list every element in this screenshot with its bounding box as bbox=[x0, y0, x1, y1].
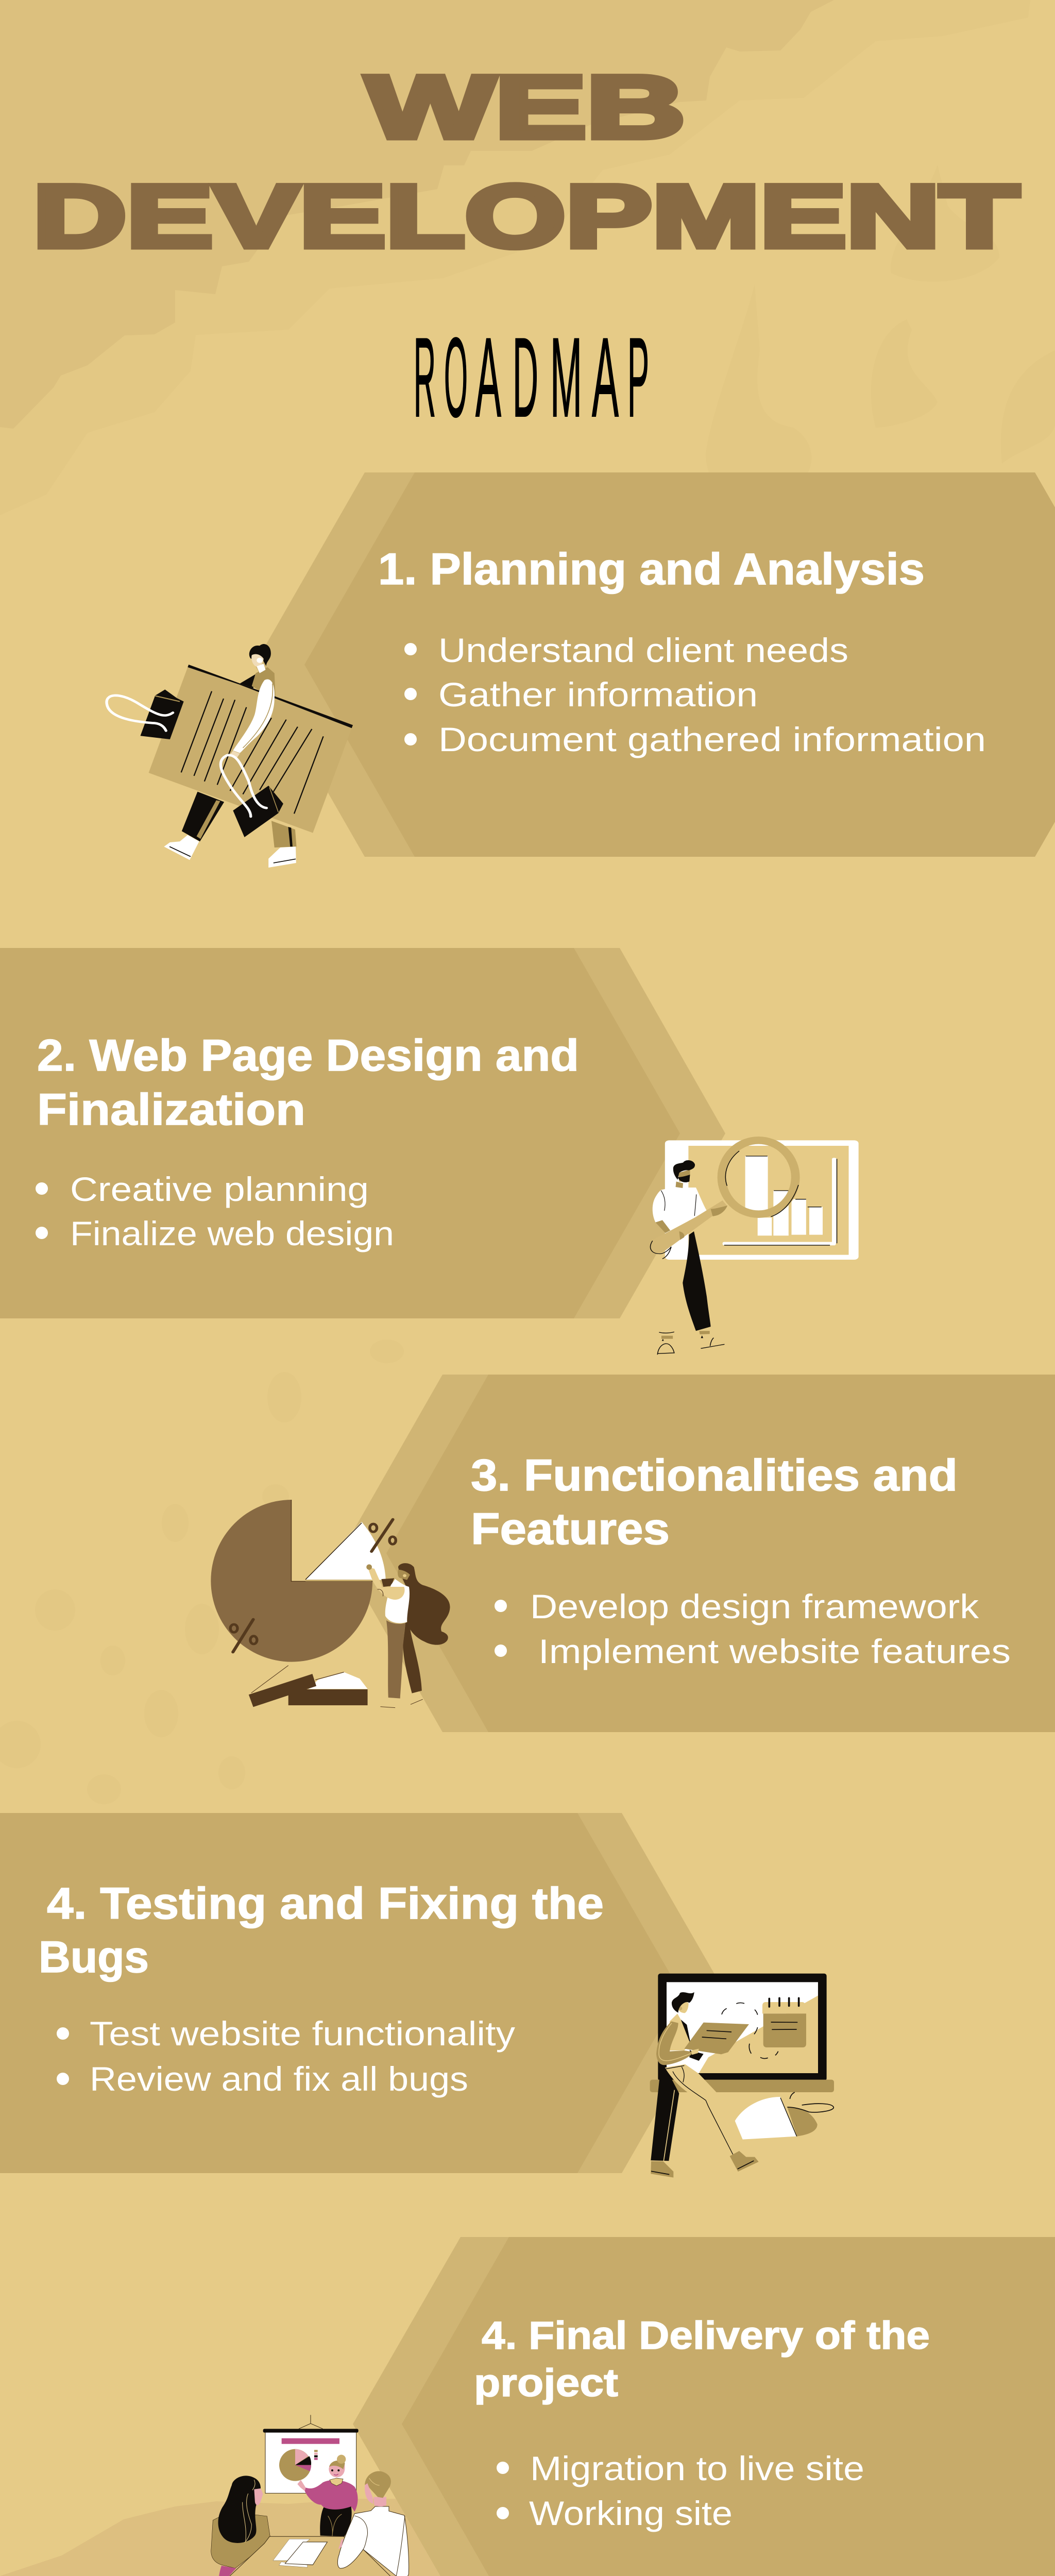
panel 4 outer band bbox=[0, 1813, 725, 2173]
panel 1 bullet list: Document gathered information bbox=[438, 720, 986, 758]
subtitle: roadmap: A bbox=[592, 315, 619, 440]
panel 5: final delivery of the project bbox=[353, 2237, 1055, 2576]
panel 2 outer band bbox=[0, 948, 725, 1318]
text: P bbox=[627, 315, 649, 440]
panel 1 inner band bbox=[304, 472, 1055, 857]
panel 4 inner band bbox=[0, 1813, 681, 2173]
panel 1 bullet list bbox=[404, 631, 986, 758]
panel 5 heading: project bbox=[474, 2361, 618, 2405]
panel 2 inner band bbox=[0, 948, 680, 1318]
panel 5 bullet list: Migration to live site bbox=[530, 2449, 864, 2487]
illustration: team meeting with presentation screen bbox=[211, 2415, 409, 2576]
panel 2: web page design and finalization bbox=[0, 948, 725, 1318]
subtitle: roadmap: M bbox=[550, 315, 582, 440]
panel 4: testing and fixing the bugs bbox=[0, 1813, 725, 2173]
panel 4 bullet list bbox=[57, 2014, 515, 2098]
panel 3 heading bbox=[471, 1451, 958, 1554]
panel 1 outer band bbox=[254, 472, 1055, 857]
panel 3 heading: Features bbox=[471, 1504, 670, 1554]
panel 1 heading: 1. Planning and Analysis bbox=[378, 545, 925, 594]
subtitle: roadmap: R bbox=[414, 315, 436, 440]
title: web development bbox=[33, 58, 1019, 266]
panel 2 heading: 2. Web Page Design and bbox=[37, 1031, 579, 1080]
subtitle: roadmap: O bbox=[444, 315, 468, 440]
panel 4 bullet list: Test website functionality bbox=[90, 2014, 515, 2053]
panel 1 bullet list: Gather information bbox=[438, 675, 758, 714]
panel 3 bullet list: Implement website features bbox=[538, 1632, 1011, 1670]
panel 4 heading: 4. Testing and Fixing the bbox=[47, 1879, 604, 1928]
subtitle: roadmap bbox=[414, 315, 649, 440]
panel 4 heading bbox=[39, 1879, 604, 1982]
panel 3 inner band bbox=[386, 1375, 1055, 1732]
illustration: man with magnifying glass and bar chart bbox=[651, 1140, 859, 1354]
panel 5 inner band bbox=[402, 2237, 1055, 2576]
title: web development: DEVELOPMENT bbox=[33, 167, 1019, 266]
panel 5 outer band bbox=[353, 2237, 1055, 2576]
panel 2 bullet list: Creative planning bbox=[70, 1170, 369, 1208]
subtitle: roadmap: A bbox=[475, 315, 501, 440]
panel 2 heading bbox=[37, 1031, 579, 1134]
panel 2 bullet list bbox=[36, 1170, 394, 1252]
title: web development: WEB bbox=[366, 58, 685, 157]
panel 1 bullet list: Understand client needs bbox=[438, 631, 848, 669]
panel 5 heading bbox=[474, 2314, 930, 2405]
panel 2 heading: Finalization bbox=[37, 1085, 305, 1134]
panel 4 bullet list: Review and fix all bugs bbox=[90, 2060, 468, 2098]
panel 4 heading: Bugs bbox=[39, 1933, 149, 1982]
panel 2 bullet list: Finalize web design bbox=[70, 1214, 394, 1252]
panel 3 outer band bbox=[341, 1375, 1055, 1732]
subtitle: roadmap: D bbox=[513, 315, 538, 440]
panel 5 heading: 4. Final Delivery of the bbox=[482, 2314, 930, 2358]
panel 5 bullet list: Working site bbox=[529, 2494, 733, 2532]
panel 3 bullet list: Develop design framework bbox=[530, 1587, 979, 1625]
illustration: person carrying document and bags bbox=[107, 644, 353, 868]
panel 5 bullet list bbox=[497, 2449, 864, 2532]
panel 3 heading: 3. Functionalities and bbox=[471, 1451, 958, 1500]
panel 1: planning and analysis bbox=[254, 472, 1055, 857]
panel 3 bullet list bbox=[495, 1587, 1011, 1670]
illustration: woman placing slice in pie chart bbox=[211, 1500, 450, 1708]
panel 3: functionalities and features bbox=[341, 1375, 1055, 1732]
illustration: man with tablet at monitor and mouse bbox=[650, 1974, 834, 2178]
